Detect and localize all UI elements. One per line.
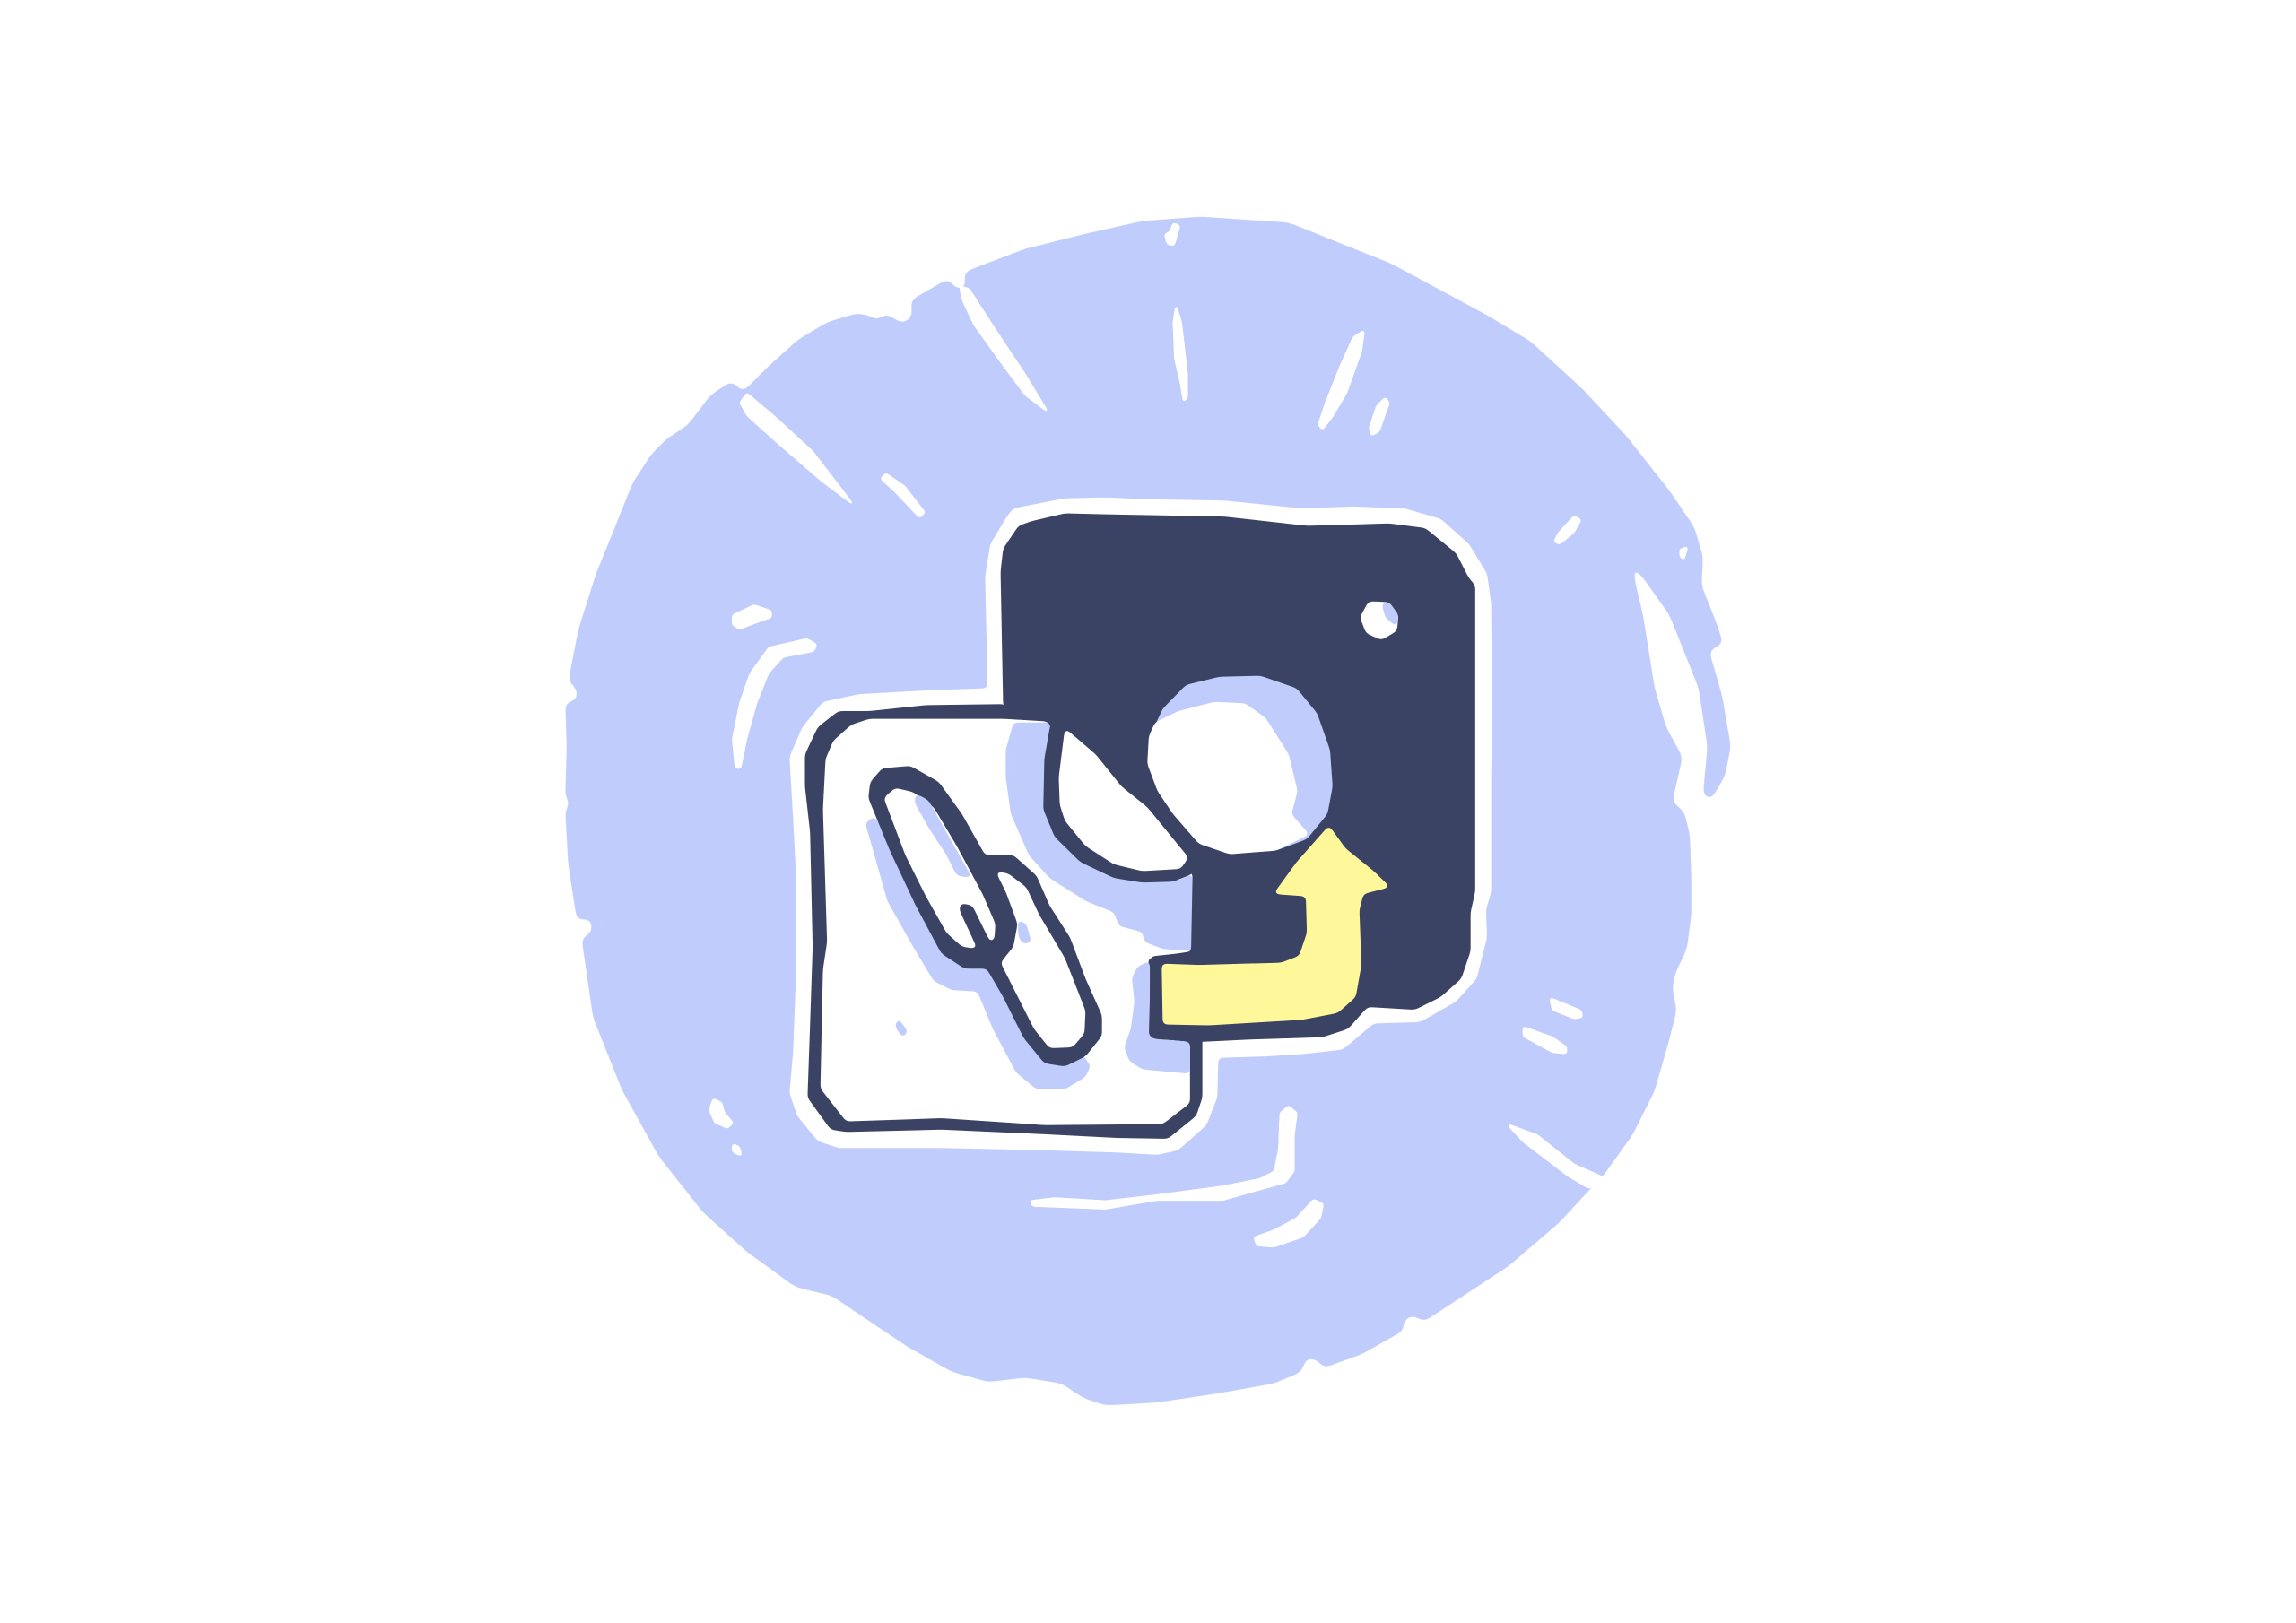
icon: paperclip link [868, 766, 1102, 1066]
dark image panel [1001, 514, 1475, 1042]
icon: lens sector [1043, 724, 1194, 882]
icon: small hole [1360, 602, 1398, 640]
white card with dark outline [804, 704, 1203, 1139]
blue blob [565, 217, 1731, 1405]
background blob with white brush marks [565, 217, 1731, 1405]
icon: linked image sticker [789, 498, 1492, 1155]
card shadows [865, 723, 1193, 1089]
white sticker halo [789, 498, 1492, 1155]
white brush marks [709, 222, 1689, 1247]
arrow: yellow upward bent arrow [1161, 826, 1390, 1025]
icon: circular lens [1147, 676, 1333, 855]
